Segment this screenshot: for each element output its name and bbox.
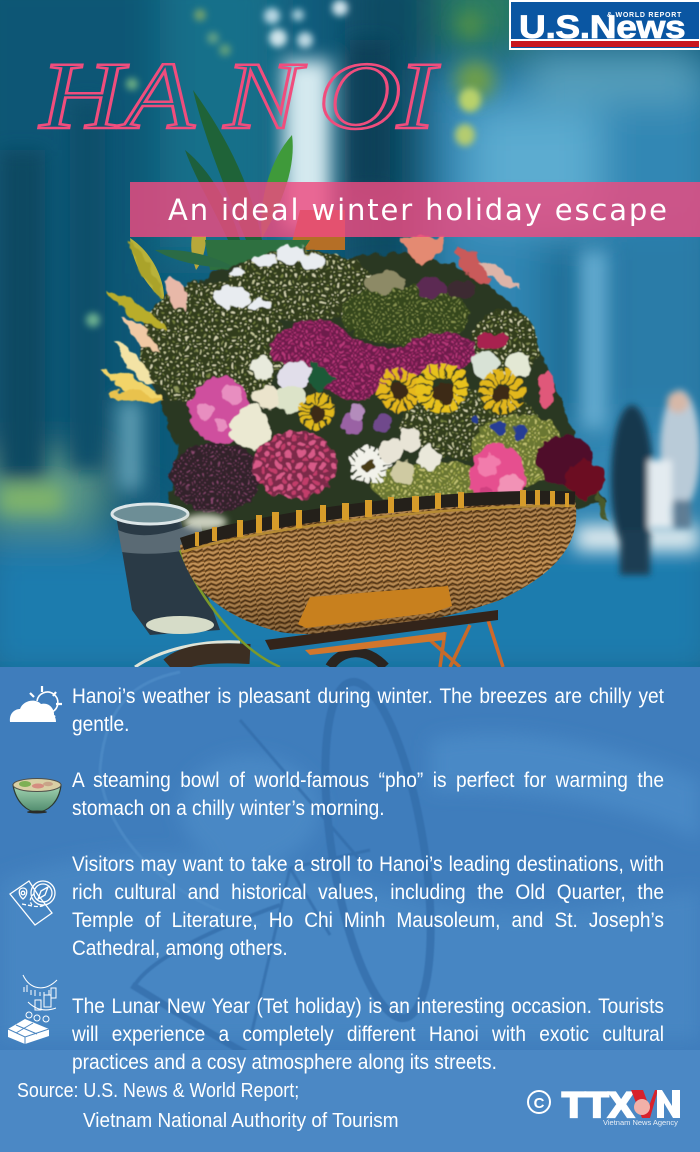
woven bamboo basket: [180, 490, 576, 634]
hydrangea: [189, 377, 251, 443]
top right lilies: [365, 237, 520, 299]
info panel background: [0, 667, 700, 1152]
flower bouquet: [101, 237, 610, 545]
white daisies: [355, 429, 442, 484]
right pink: [540, 370, 554, 410]
text block: pho: [72, 769, 664, 820]
text block: pho: A steaming bowl of world-famous “pho” is perfect for warming the: [72, 769, 664, 792]
text block: destinations: rich cultural and historical values, including the Old Quarter, the: [72, 881, 664, 904]
greenery masses: [140, 249, 605, 545]
white roses: [230, 352, 531, 450]
logo: U.S. News & World Report: U.S.News: [519, 10, 685, 45]
hydrangea highlight: [197, 385, 242, 431]
pink rose cluster: [253, 431, 337, 499]
logo: U.S. News & World Report: & WORLD REPORT: [607, 12, 682, 19]
sunflowers: [304, 370, 517, 424]
text block: destinations: [72, 853, 664, 960]
source line 1: Source: U.S. News & World Report;: [17, 1079, 299, 1102]
copyright mark: [528, 1091, 550, 1113]
text block: weather: [72, 685, 664, 736]
magenta clusters: [268, 319, 508, 401]
text block: destinations: Cathedral, among others.: [72, 937, 288, 960]
purple roses: [341, 404, 392, 435]
title: HANOI: HA NOI: [38, 43, 440, 149]
text block: Tet holiday: The Lunar New Year (Tet holiday) is an interesting occasion. Tourists: [72, 995, 664, 1018]
blurred pedestrians: [611, 390, 700, 575]
left lilies: [101, 240, 186, 403]
bicycle front basket: [112, 504, 227, 635]
icon: sun behind cloud: [10, 686, 62, 722]
text block: weather: gentle.: [72, 713, 129, 736]
dark purple gypsophila: [170, 443, 260, 513]
text block: destinations: Visitors may want to take a stroll to Hanoi’s leading destinations, with: [72, 853, 664, 876]
ghost bicycle: [100, 672, 450, 1065]
text block: pho: stomach on a chilly winter’s morning.: [72, 797, 385, 820]
copyright mark: C: [534, 1095, 545, 1112]
top white flowers: [215, 244, 324, 310]
subtitle banner: [130, 182, 700, 237]
photo background: blurred street and trees: [0, 0, 700, 680]
text block: Tet holiday: [72, 995, 664, 1074]
bicycle mudguard and wheel: [135, 550, 503, 667]
logo: TTXVN Vietnam News Agency: TTX: [562, 1086, 634, 1125]
palm leaves above the bouquet: [130, 90, 345, 300]
text block: destinations: Temple of Literature, Ho Chi Minh Mausoleum, and St. Joseph’s: [72, 909, 664, 932]
subtitle banner: An ideal winter holiday escape: [168, 193, 667, 227]
icon: map and compass: [10, 881, 55, 925]
dark red flowers: [537, 435, 610, 522]
logo: U.S. News & World Report: [509, 0, 700, 50]
rim binding: [195, 490, 569, 546]
logo: TTXVN Vietnam News Agency: Vietnam News Agency: [603, 1118, 678, 1127]
paper bundle and rear rack: [265, 586, 498, 655]
source line 2: Vietnam National Authority of Tourism: [83, 1109, 399, 1132]
text block: weather: Hanoi’s weather is pleasant during winter. The breezes are chilly yet: [72, 685, 664, 708]
logo: TTXVN Vietnam News Agency: [562, 1086, 680, 1127]
text block: Tet holiday: will experience a completely different Hanoi with exotic cultural: [72, 1023, 664, 1046]
icon: Tet lanterns and banh chung: [8, 975, 57, 1044]
big pink peony: [469, 443, 525, 513]
icon: pho bowl: [13, 778, 61, 814]
text block: Tet holiday: practices and a cosy atmosphere along its streets.: [72, 1051, 497, 1074]
blue flowers: [471, 416, 527, 439]
